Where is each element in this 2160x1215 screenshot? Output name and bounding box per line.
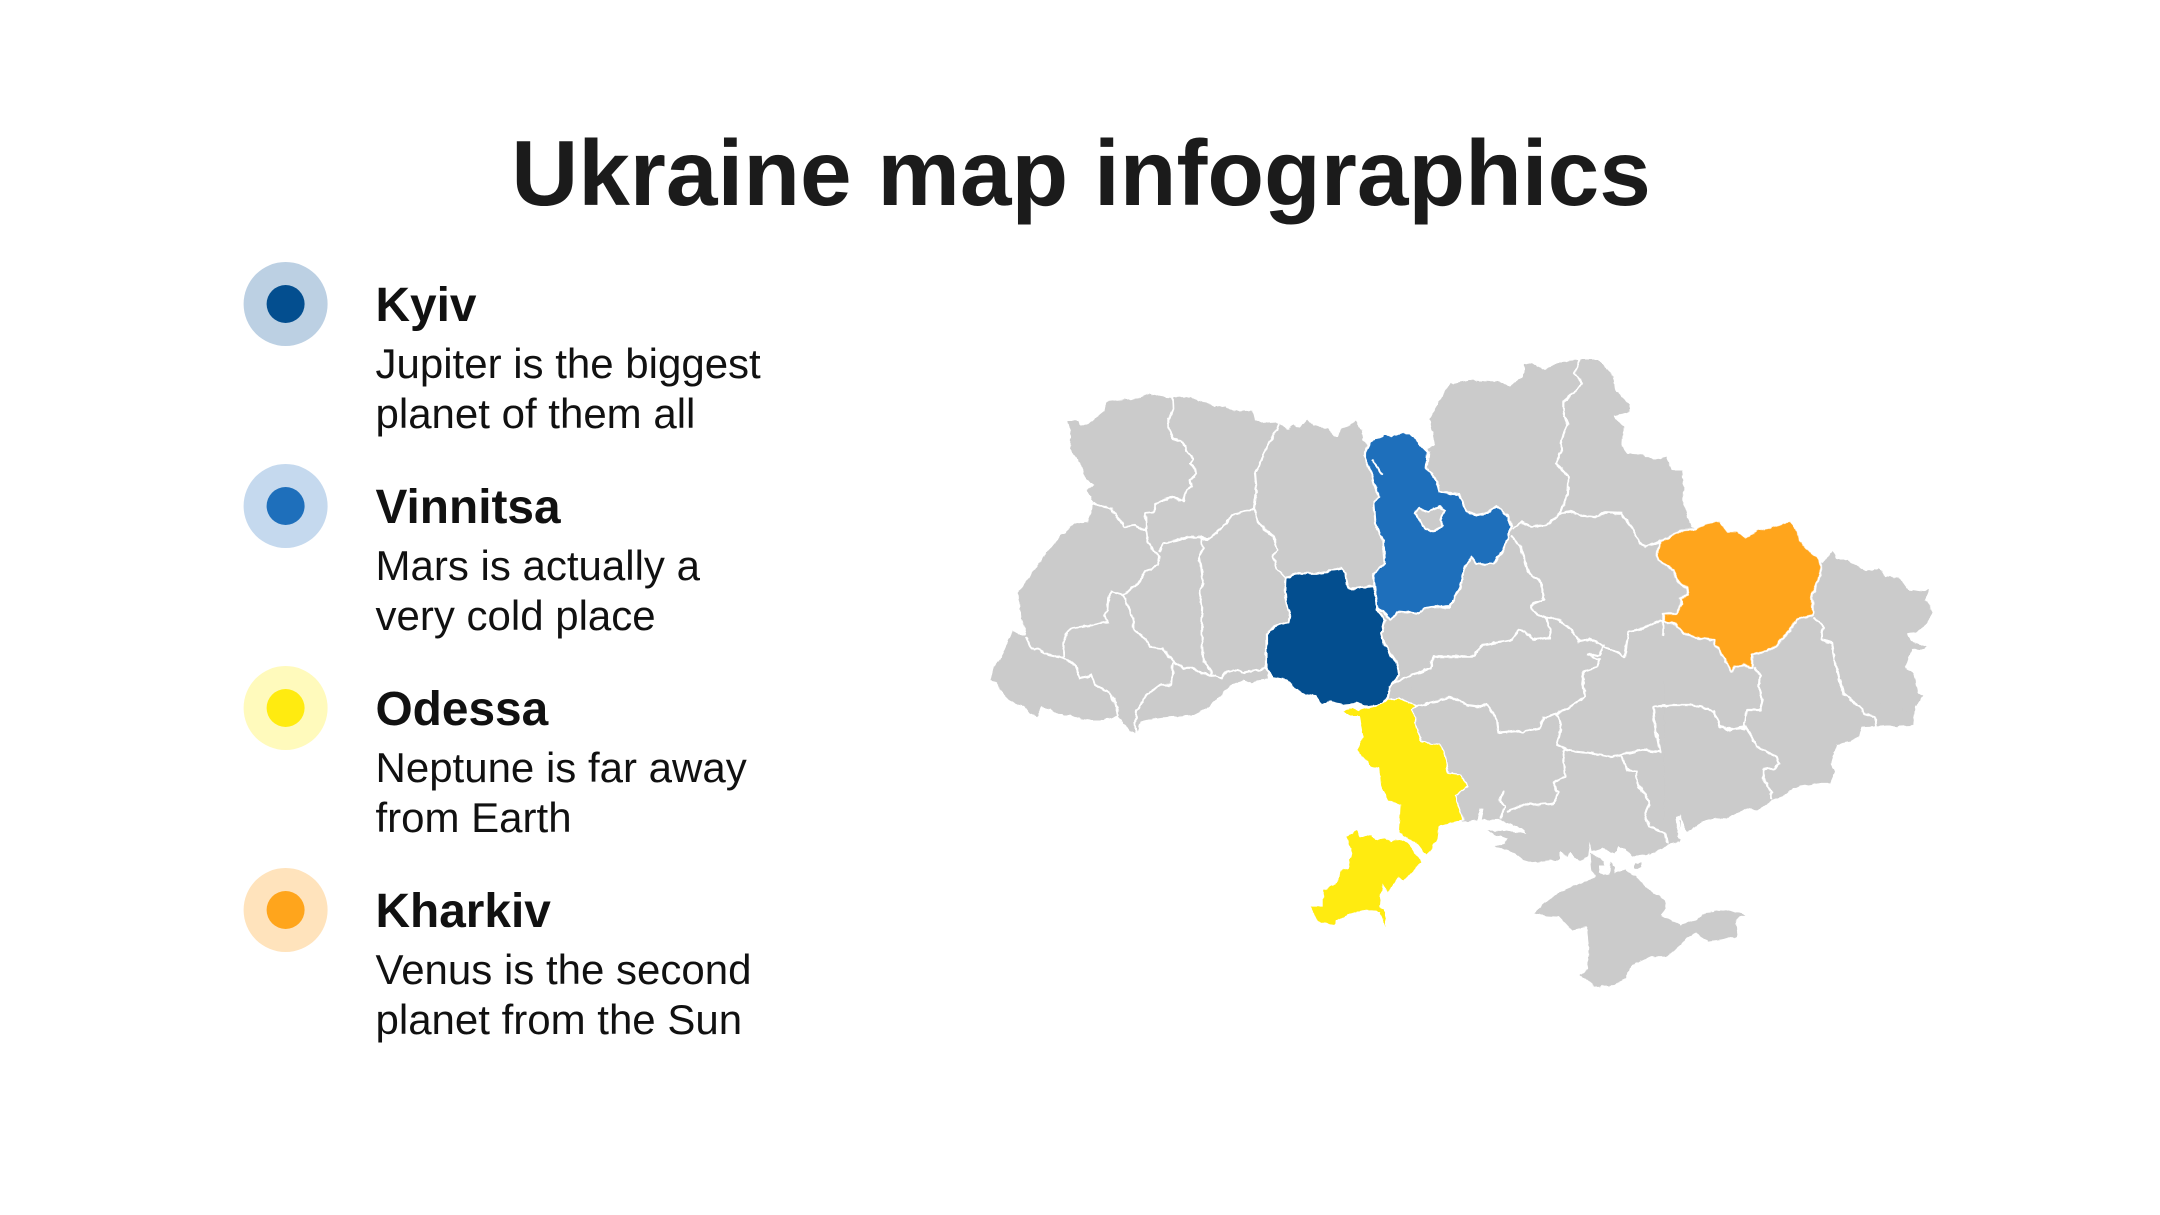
legend item: Kharkiv bbox=[244, 868, 751, 1043]
region: Vinnytsia dark blue bbox=[1266, 567, 1399, 707]
legend item: Vinnitsa: Mars is actually a bbox=[376, 542, 701, 589]
legend item: Odessa bbox=[244, 666, 747, 841]
legend item: Kyiv: Jupiter is the biggest bbox=[376, 340, 761, 387]
legend item: Kharkiv: Kharkiv bbox=[376, 885, 551, 938]
legend item: Kharkiv: planet from the Sun bbox=[376, 996, 742, 1043]
legend item: Odessa: from Earth bbox=[376, 794, 572, 841]
region: Kharkiv orange bbox=[1657, 521, 1822, 672]
grey base of the country bbox=[991, 360, 1933, 987]
legend item: Vinnitsa bbox=[244, 464, 701, 639]
legend item: Odessa: Odessa bbox=[376, 683, 549, 736]
region: Kyiv oblast blue bbox=[1365, 433, 1512, 620]
legend item: Kharkiv: Venus is the second bbox=[376, 946, 751, 993]
oblast borders bbox=[1027, 360, 1877, 843]
title: Ukraine map infographics bbox=[511, 121, 1651, 225]
legend item: Kyiv: planet of them all bbox=[376, 390, 695, 437]
legend item: Kyiv: Kyiv bbox=[376, 279, 477, 332]
legend item: Vinnitsa: very cold place bbox=[376, 592, 656, 639]
legend item: Kyiv bbox=[244, 262, 761, 437]
legend item: Odessa: Neptune is far away bbox=[376, 744, 747, 791]
legend item: Vinnitsa: Vinnitsa bbox=[376, 481, 561, 534]
Crimea bbox=[1534, 870, 1746, 987]
map of Ukraine bbox=[991, 360, 1933, 987]
region: Odessa yellow bbox=[1311, 698, 1468, 927]
